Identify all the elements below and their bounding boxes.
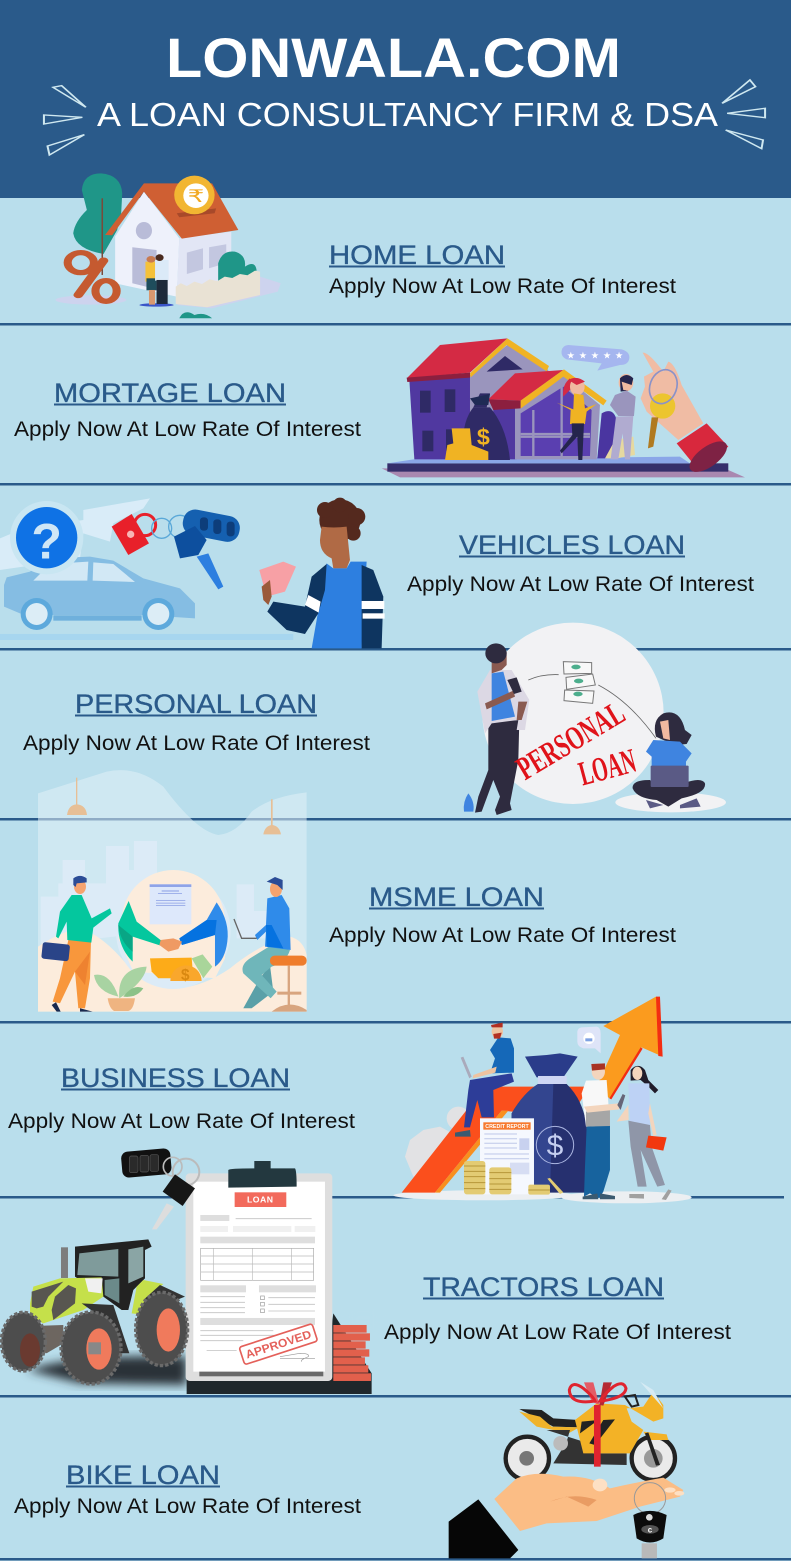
heading: personal loan: PERSONAL LOAN: [75, 689, 317, 719]
businessman right: [234, 877, 307, 1012]
text: mortgage loan: Apply Now At Low Rate Of Interest: [14, 418, 361, 441]
credit report: [480, 1118, 534, 1194]
heading: business loan: BUSINESS LOAN: [61, 1063, 290, 1093]
businessman left: [41, 876, 112, 1012]
coins: $: [181, 967, 190, 984]
icon: key fob: [174, 507, 242, 589]
tractor: [1, 1239, 188, 1384]
gears: [405, 1107, 470, 1177]
man: [582, 1063, 625, 1199]
illustration: tractors loan: [1, 1148, 380, 1394]
icon: black key fob: [121, 1148, 199, 1229]
money bag: [445, 393, 510, 460]
illustration: business loan: [393, 997, 692, 1203]
bike key: c: [648, 1525, 653, 1534]
clipboard: LOAN: [247, 1195, 273, 1205]
text: msme loan: Apply Now At Low Rate Of Interest: [329, 924, 676, 947]
woman: [617, 1066, 672, 1200]
title: LONWALA.COM: [166, 26, 621, 89]
icon: speech bubble stars: ★★★★★: [567, 350, 623, 361]
handshake: [118, 901, 228, 967]
heading: vehicles loan: VEHICLES LOAN: [459, 530, 685, 560]
text: home loan: Apply Now At Low Rate Of Interest: [329, 275, 676, 298]
illustration: mortgage loan: [382, 338, 745, 478]
coins: [150, 954, 212, 984]
document: [150, 884, 191, 924]
text: bike loan: Apply Now At Low Rate Of Interest: [14, 1495, 361, 1518]
heading: tractors loan: TRACTORS LOAN: [423, 1272, 664, 1302]
cuff: [449, 1499, 518, 1558]
hand with key: [641, 353, 732, 478]
money bag: [510, 1053, 589, 1193]
text: vehicles loan: Apply Now At Low Rate Of Interest: [407, 573, 754, 596]
heading: mortgage loan: MORTAGE LOAN: [54, 378, 286, 408]
money bag: $: [477, 424, 490, 450]
header banner: [0, 0, 791, 198]
clipboard: [186, 1161, 332, 1381]
illustration: personal loan: [464, 623, 726, 815]
red arrow: [402, 997, 663, 1193]
text: personal stamp: PERSONAL: [510, 694, 631, 788]
plant: [94, 967, 147, 1011]
icon: left sparks: [44, 86, 86, 155]
heading: home loan: HOME LOAN: [329, 240, 505, 270]
chart bubble: [577, 1027, 601, 1053]
illustration: bike loan: [449, 1382, 684, 1558]
icon: speech bubble stars: [562, 345, 629, 371]
approved stamp: APPROVED: [244, 1328, 313, 1362]
money bag: $: [547, 1130, 564, 1163]
man: [475, 643, 529, 815]
illustration: vehicles loan: [0, 498, 385, 648]
arrows: [528, 675, 656, 738]
credit report: CREDIT REPORT: [485, 1124, 529, 1130]
icon: rupee coin: [174, 176, 215, 214]
lamps: [67, 778, 281, 834]
heading: bike loan: BIKE LOAN: [66, 1460, 220, 1490]
approved stamp: [239, 1324, 318, 1365]
text: tractors loan: Apply Now At Low Rate Of Interest: [384, 1321, 731, 1344]
icon: question mark: ?: [31, 513, 62, 569]
man: [610, 374, 636, 459]
icon: padlock: [112, 514, 156, 555]
text: personal loan: Apply Now At Low Rate Of Interest: [23, 732, 370, 755]
icon: question mark: [10, 501, 83, 574]
icon: right sparks: [722, 80, 765, 149]
icon: percent sign: [68, 253, 117, 301]
money notes: [563, 662, 595, 703]
car: [4, 557, 195, 630]
text: loan stamp: LOAN: [575, 742, 640, 793]
shadow: [27, 1307, 380, 1394]
heading: msme loan: MSME LOAN: [369, 882, 544, 912]
illustration: msme loan: [38, 770, 307, 1012]
couple: [139, 254, 174, 307]
motorcycle: [506, 1382, 675, 1480]
coin stacks: [464, 1161, 563, 1195]
woman: [633, 712, 705, 808]
coins stack: [333, 1325, 371, 1381]
gift ribbon: [569, 1382, 626, 1467]
person with cash: [259, 498, 385, 648]
hand: [494, 1474, 684, 1531]
woman: [557, 378, 597, 460]
text: business loan: Apply Now At Low Rate Of Interest: [8, 1110, 355, 1133]
bike key: [633, 1483, 667, 1558]
person on arrow: [455, 1023, 514, 1137]
icon: rupee coin: ₹: [188, 186, 204, 207]
illustration: home loan: [56, 173, 281, 318]
subtitle: A LOAN CONSULTANCY FIRM & DSA: [97, 96, 718, 133]
